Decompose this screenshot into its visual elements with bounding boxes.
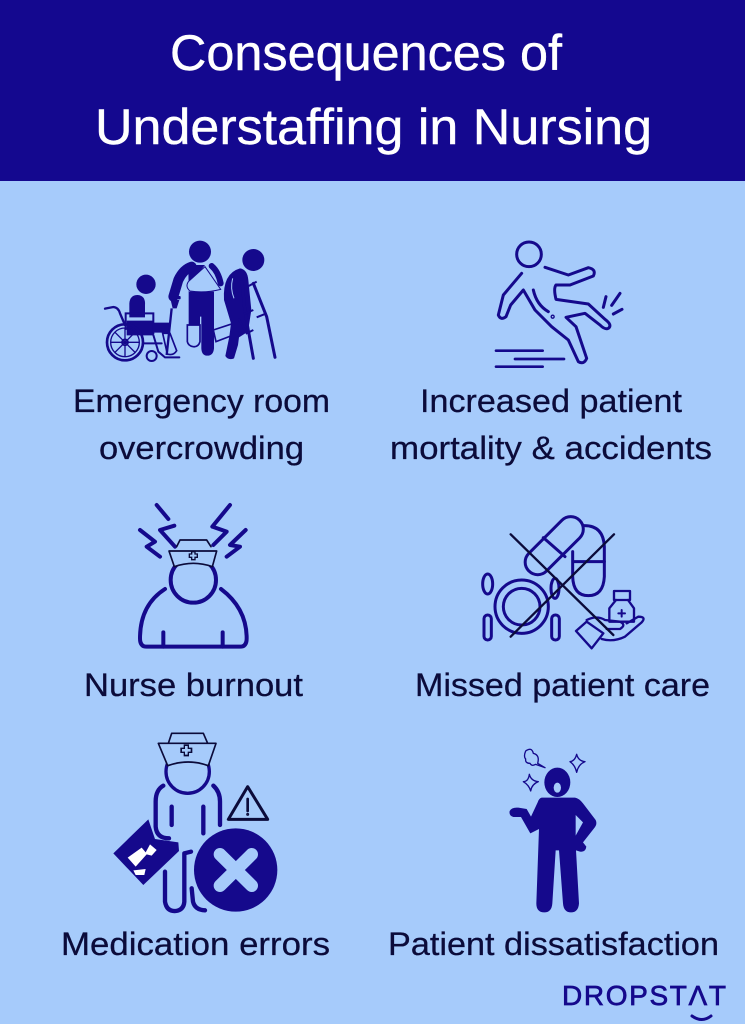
panel: increased patient mortality and accidents: [390, 242, 712, 466]
label: Medication errors: [61, 926, 330, 962]
icon: crossed-out meals and medicine: [483, 511, 644, 648]
icon: injured patients: [105, 241, 275, 361]
label: Increased patient: [420, 383, 682, 419]
panel: missed patient care: [415, 511, 710, 703]
label: Emergency room: [73, 383, 330, 419]
icon: stressed nurse: [140, 505, 247, 647]
label: Missed patient care: [415, 667, 710, 703]
label: Nurse burnout: [84, 667, 303, 703]
panel: nurse burnout: [84, 505, 303, 703]
label: mortality & accidents: [390, 430, 712, 466]
icon: person slipping: [496, 242, 622, 367]
panel: patient dissatisfaction: [388, 749, 719, 962]
label: Patient dissatisfaction: [388, 926, 719, 962]
label: [73, 383, 330, 466]
logo: Dropstat: DROPSTΛT: [562, 980, 726, 1011]
title: [95, 25, 652, 155]
icon: nurse with error symbol: [113, 733, 277, 912]
panel: emergency room overcrowding: [73, 241, 330, 466]
header banner: [0, 0, 745, 181]
panel: medication errors: [61, 733, 330, 962]
icon: frustrated patient: [509, 749, 596, 912]
label: [390, 383, 712, 466]
title: Understaffing in Nursing: [95, 99, 652, 155]
title: Consequences of: [170, 25, 562, 81]
label: overcrowding: [99, 430, 304, 466]
